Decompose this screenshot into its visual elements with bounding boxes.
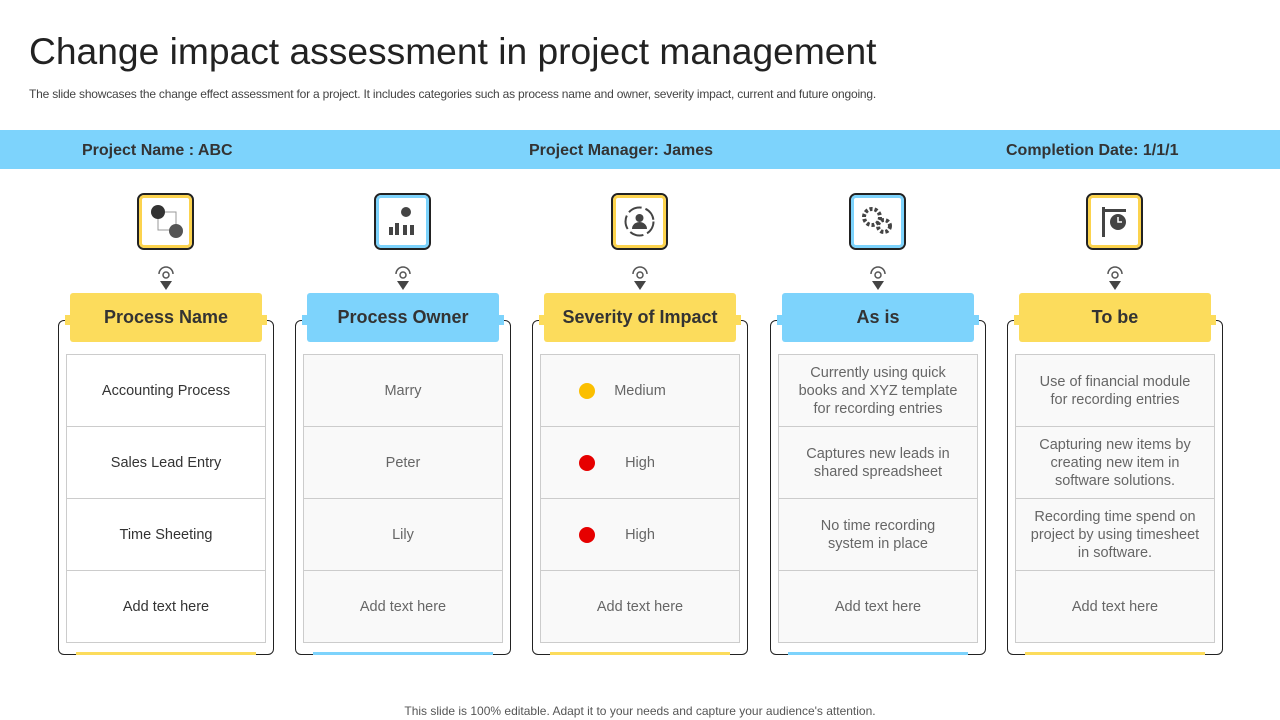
icon: chart people <box>374 193 431 250</box>
footer note: This slide is 100% editable. Adapt it to your needs and capture your audience's attention. <box>404 704 876 718</box>
icon: gears <box>849 193 906 250</box>
header: process name: Process Name <box>104 307 228 327</box>
table: owners <box>303 354 503 643</box>
table: to be: Add text here <box>1072 598 1158 614</box>
panel: process owner <box>295 193 511 655</box>
panel: as is <box>770 193 986 655</box>
project info band: Completion Date: 1/1/1 <box>1006 142 1178 159</box>
table: severity: High <box>625 454 655 470</box>
header: as is <box>782 293 974 342</box>
table: severity: Medium <box>614 382 666 398</box>
table: process names: Accounting Process <box>102 382 230 398</box>
subtitle: The slide showcases the change effect assessment for a project. It includes categories such as process name and owner, severity impact, current and future ongoing. <box>29 87 876 101</box>
table: severity: Add text here <box>597 598 683 614</box>
table: to be: Use of financial module for recording entries <box>1040 374 1190 408</box>
header: as is: As is <box>856 307 900 327</box>
icon: pin <box>1107 266 1123 290</box>
header: severity: Severity of Impact <box>562 307 718 327</box>
table: owners: Lily <box>392 526 414 542</box>
header: to be <box>1019 293 1211 342</box>
project info band: Project Manager: James <box>529 142 713 159</box>
icon: pin <box>870 266 886 290</box>
project info band <box>0 130 1280 169</box>
panel: to be <box>1007 193 1223 655</box>
panel: process name <box>58 193 274 655</box>
table: as is: Currently using quick books and XYZ template for recording entries <box>799 364 957 416</box>
table: process names: Sales Lead Entry <box>111 454 221 470</box>
table: as is: Captures new leads in shared spreadsheet <box>806 446 950 480</box>
header: process owner: Process Owner <box>337 307 469 327</box>
table: to be: Recording time spend on project by using timesheet in software. <box>1031 508 1199 560</box>
table: process names: Add text here <box>123 598 209 614</box>
header: process owner <box>307 293 499 342</box>
table: as is: Add text here <box>835 598 921 614</box>
icon: clock sign <box>1086 193 1143 250</box>
table: process names: Time Sheeting <box>120 526 212 542</box>
table: as is: No time recording system in place <box>821 518 935 552</box>
header: severity <box>544 293 736 342</box>
table: to be: Capturing new items by creating new item in software solutions. <box>1039 436 1191 488</box>
icon: pin <box>395 266 411 290</box>
table: owners: Add text here <box>360 598 446 614</box>
project info band: Project Name : ABC <box>82 142 233 159</box>
table: owners: Peter <box>386 454 420 470</box>
table: to be <box>1015 354 1215 643</box>
table: severity <box>540 354 740 643</box>
icon: process <box>137 193 194 250</box>
icon: target person <box>611 193 668 250</box>
header: process name <box>70 293 262 342</box>
panel: severity <box>532 193 748 655</box>
table: owners: Marry <box>384 382 422 398</box>
table: as is <box>778 354 978 643</box>
title: Change impact assessment in project management <box>29 30 876 72</box>
header: to be: To be <box>1092 307 1138 327</box>
icon: pin <box>632 266 648 290</box>
table: process names <box>66 354 266 643</box>
icon: pin <box>158 266 174 290</box>
table: severity: High <box>625 526 655 542</box>
